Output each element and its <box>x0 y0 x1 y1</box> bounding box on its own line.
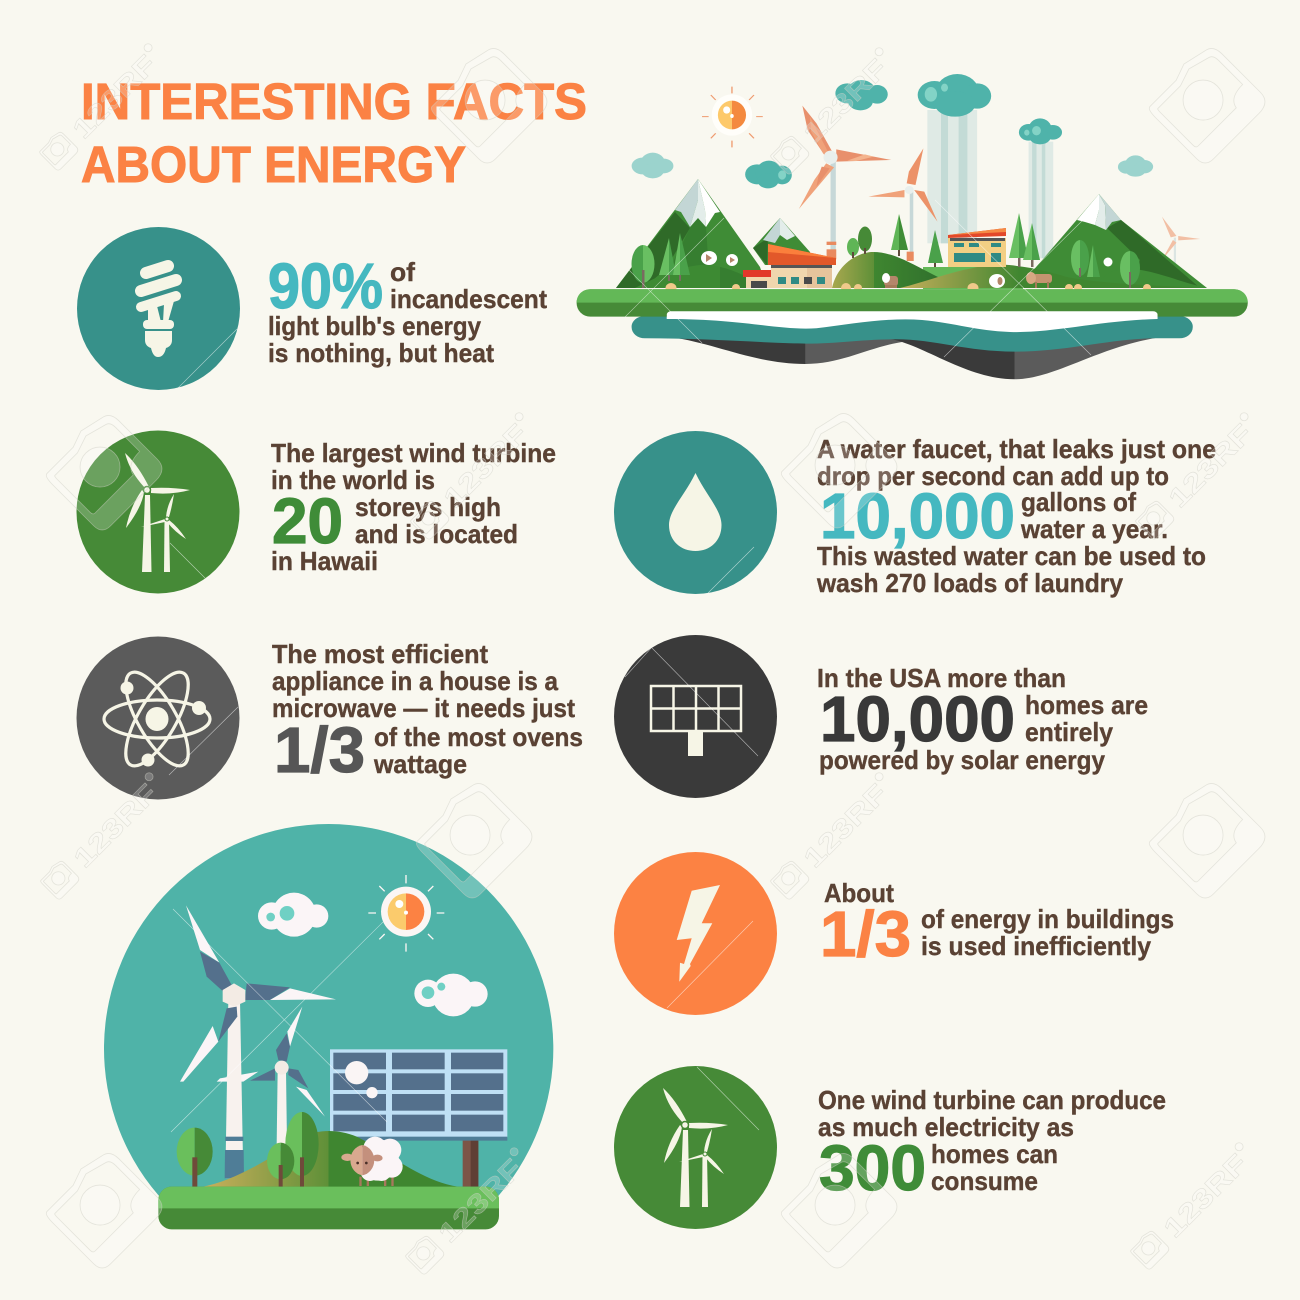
text: 300 homes: 300 <box>819 1132 926 1204</box>
text: 20 storeys high: storeys high <box>355 492 501 522</box>
icon: wind turbines <box>76 430 240 594</box>
text: 300 homes <box>818 1085 1166 1204</box>
wind turbines <box>799 106 1200 283</box>
sun <box>368 875 444 952</box>
fact: microwave <box>76 636 583 800</box>
text: 10,000 gallons of water: 10,000 <box>820 480 1015 552</box>
text: 90% of incandescent: incandescent <box>390 284 547 314</box>
text: 300 homes: One wind turbine can produce <box>818 1085 1166 1115</box>
text: 90% of incandescent: of <box>390 257 415 287</box>
text: 300 homes: as much electricity as <box>818 1112 1074 1142</box>
cloud left <box>258 893 328 937</box>
text: 1/3 of the most ovens wattage: microwave — it needs just <box>272 693 575 723</box>
123RF watermark pattern: 123RF <box>798 778 893 874</box>
text: 10,000 homes solar: entirely <box>1025 717 1113 747</box>
text: about 1/3: of energy in buildings <box>921 904 1174 934</box>
text: 1/3 of the most ovens wattage: of the most ovens <box>374 722 583 752</box>
cloud right <box>414 974 488 1016</box>
large wind turbine <box>180 905 336 1178</box>
fact: buildings energy <box>614 852 1174 1015</box>
text: 10,000 homes solar: 10,000 <box>820 683 1015 755</box>
fact: water faucet <box>614 431 1216 598</box>
field and hills <box>832 252 1200 289</box>
thin scratch lines <box>169 200 1091 1132</box>
text: 10,000 homes solar: homes are <box>1025 690 1148 720</box>
123RF watermark pattern: 123RF <box>1158 1148 1253 1244</box>
grass platform <box>158 1187 499 1229</box>
text: 300 homes: consume <box>931 1166 1038 1196</box>
text: 1/3 of the most ovens wattage: wattage <box>373 749 467 779</box>
text: about 1/3: is used inefficiently <box>921 931 1152 961</box>
text: about 1/3 <box>820 878 1174 970</box>
123RF watermark pattern: 123RF <box>798 53 893 149</box>
sheep and cows <box>701 251 1112 288</box>
farm building <box>743 244 836 288</box>
text: 1/3 of the most ovens wattage: The most efficient <box>272 639 488 669</box>
text: 20 storeys high: in Hawaii <box>271 546 378 576</box>
text: 20 storeys high: and is located <box>355 519 518 549</box>
trees <box>177 1112 319 1187</box>
trees <box>632 213 1140 288</box>
text: 1/3 of the most ovens wattage: 1/3 <box>274 714 365 786</box>
rain columns <box>927 110 1053 258</box>
title: INTERESTING FACTS <box>81 73 587 130</box>
123RF watermark pattern: 123RF <box>1163 418 1258 514</box>
icon: wind turbines <box>614 1066 777 1229</box>
title: ABOUT ENERGY <box>81 136 466 193</box>
floating island base <box>577 289 1248 379</box>
text: about 1/3: 1/3 <box>820 898 911 970</box>
top landscape illustration <box>577 74 1248 379</box>
text: 1/3 of the most ovens wattage: appliance in a house is a <box>272 666 559 696</box>
icon: atom <box>76 636 240 800</box>
text: 1/3 of the most ovens wattage <box>272 639 583 786</box>
text: 10,000 homes solar <box>817 663 1148 775</box>
small wind turbine <box>217 1007 325 1145</box>
text: 20 storeys high: The largest wind turbine <box>271 438 556 468</box>
text: 300 homes: homes can <box>931 1139 1058 1169</box>
icon: light bulb <box>77 227 240 390</box>
text: 20 storeys high: 20 <box>272 485 343 557</box>
bottom round illustration <box>104 824 553 1229</box>
text: 90% of incandescent <box>268 250 547 368</box>
fact: light bulb <box>77 227 547 390</box>
second building <box>948 228 1006 267</box>
title <box>81 73 587 193</box>
grassy hill <box>200 1131 463 1187</box>
text: 10,000 gallons of water: This wasted water can be used to <box>817 541 1206 571</box>
123RF watermark pattern: 123RF <box>67 49 162 145</box>
icon: lightning bolt <box>614 852 777 1015</box>
right mountain <box>1018 194 1207 288</box>
123RF watermark pattern: 123RF <box>433 1153 528 1249</box>
icon: water drop <box>614 431 777 594</box>
clouds <box>632 74 1153 188</box>
fact: one wind turbine <box>614 1066 1166 1229</box>
sheep <box>341 1137 403 1186</box>
text: about 1/3: About <box>824 878 894 908</box>
text: 10,000 gallons of water: drop per second can add up to <box>817 461 1169 491</box>
text: 10,000 gallons of water: A water faucet, that leaks just one <box>817 434 1216 464</box>
text: 90% of incandescent: 90% <box>268 250 383 322</box>
sky elements <box>632 74 1153 258</box>
bushes <box>666 283 1151 293</box>
text: 10,000 homes solar: In the USA more than <box>817 663 1066 693</box>
text: 20 storeys high: in the world is <box>271 465 435 495</box>
solar panel <box>330 1049 507 1187</box>
text: 90% of incandescent: light bulb's energy <box>268 311 481 341</box>
text: 10,000 gallons of water: water a year. <box>1020 514 1168 544</box>
text: 10,000 gallons of water <box>816 434 1216 598</box>
text: 20 storeys high <box>271 438 556 576</box>
fact: largest wind turbine <box>76 430 556 594</box>
text: 10,000 gallons of water: gallons of <box>1021 487 1136 517</box>
small mountain <box>753 218 810 265</box>
123RF watermark pattern: 123RF <box>438 418 533 514</box>
fact: solar homes <box>614 635 1148 798</box>
left mountain <box>616 179 767 288</box>
123RF watermark pattern: 123RF <box>68 778 163 874</box>
teal disc background <box>104 824 553 1203</box>
text: 90% of incandescent: is nothing, but heat <box>268 338 494 368</box>
icon: solar panel <box>614 635 777 798</box>
text: 10,000 homes solar: powered by solar energy <box>819 745 1106 775</box>
text: 10,000 gallons of water: wash 270 loads of laundry <box>816 568 1124 598</box>
sun <box>702 87 763 147</box>
